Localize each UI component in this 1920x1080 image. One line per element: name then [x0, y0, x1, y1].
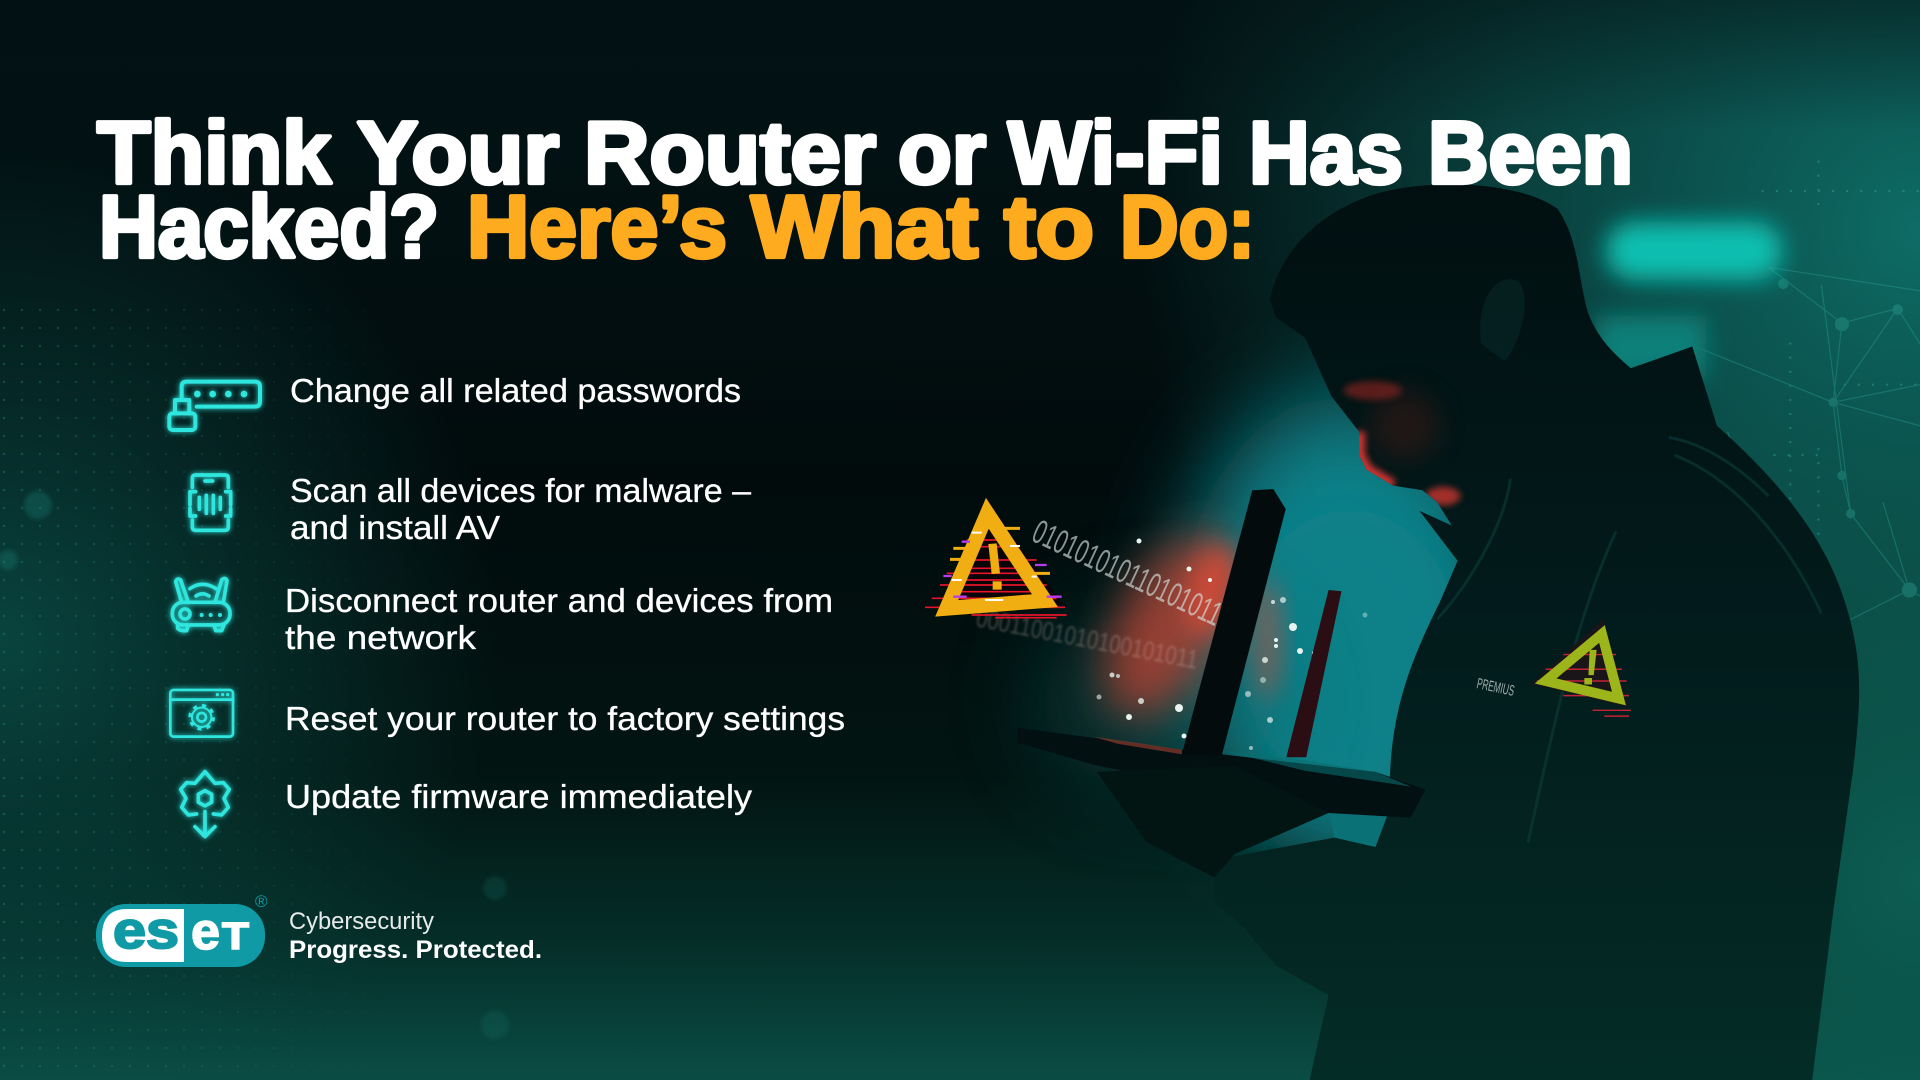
title: Here’s	[467, 177, 727, 276]
title: Hacked?	[99, 177, 439, 276]
title: Been	[1428, 103, 1633, 202]
title: Wi-Fi	[1008, 103, 1223, 202]
title	[97, 103, 1633, 276]
icon: phone scan	[190, 475, 231, 530]
icon: browser settings gear	[170, 690, 233, 737]
ESET logo: T	[222, 916, 249, 958]
ESET logo: es	[113, 902, 179, 960]
text: disconnect router	[285, 582, 833, 656]
teal gap under laptop	[1329, 807, 1393, 848]
text: disconnect router: the network	[285, 619, 477, 656]
text: scan devices: and install AV	[290, 509, 500, 546]
teal glow behind laptop	[1040, 395, 1510, 865]
jacket patch text: PREMIUS	[1475, 675, 1516, 700]
title: Your	[357, 103, 559, 202]
text: update firmware: Update firmware immediately	[285, 778, 753, 815]
icon: firmware update gear	[181, 772, 229, 837]
binary code streams: 0101010101101010110	[1027, 513, 1238, 639]
ESET logo: ®	[255, 892, 268, 911]
title: Has	[1249, 103, 1403, 202]
logo tagline	[289, 908, 542, 964]
title: Router	[584, 103, 876, 202]
text: disconnect router: Disconnect router and devices from	[285, 582, 833, 619]
laptop	[1018, 489, 1425, 878]
title: Think	[97, 103, 332, 202]
red burst from screen	[1079, 513, 1282, 737]
logo tagline: Cybersecurity	[289, 908, 434, 935]
icon: router	[172, 578, 230, 631]
warning triangle green on sleeve	[1531, 619, 1631, 716]
text: scan devices	[290, 472, 752, 546]
network lines background	[1522, 162, 1920, 1070]
logo tagline: Progress. Protected.	[289, 936, 542, 964]
title: What	[751, 177, 978, 276]
man silhouette	[1214, 184, 1859, 1080]
ESET logo	[96, 892, 268, 967]
ESET logo: e	[191, 903, 220, 961]
binary code streams	[974, 513, 1238, 675]
router antenna behind laptop	[1286, 590, 1341, 757]
title: or	[898, 103, 986, 202]
text: change passwords: Change all related passwords	[290, 372, 741, 409]
icon: password lock	[169, 382, 260, 430]
light bar behind head	[1596, 222, 1782, 378]
warning triangle yellow	[925, 502, 1067, 618]
title: Do:	[1120, 177, 1255, 276]
text: reset router: Reset your router to factory settings	[285, 700, 845, 737]
text: scan devices: Scan all devices for malware –	[290, 472, 752, 509]
title: to	[1004, 177, 1094, 276]
particles	[1096, 538, 1368, 750]
binary code streams: 00011001010100101011	[974, 602, 1200, 675]
